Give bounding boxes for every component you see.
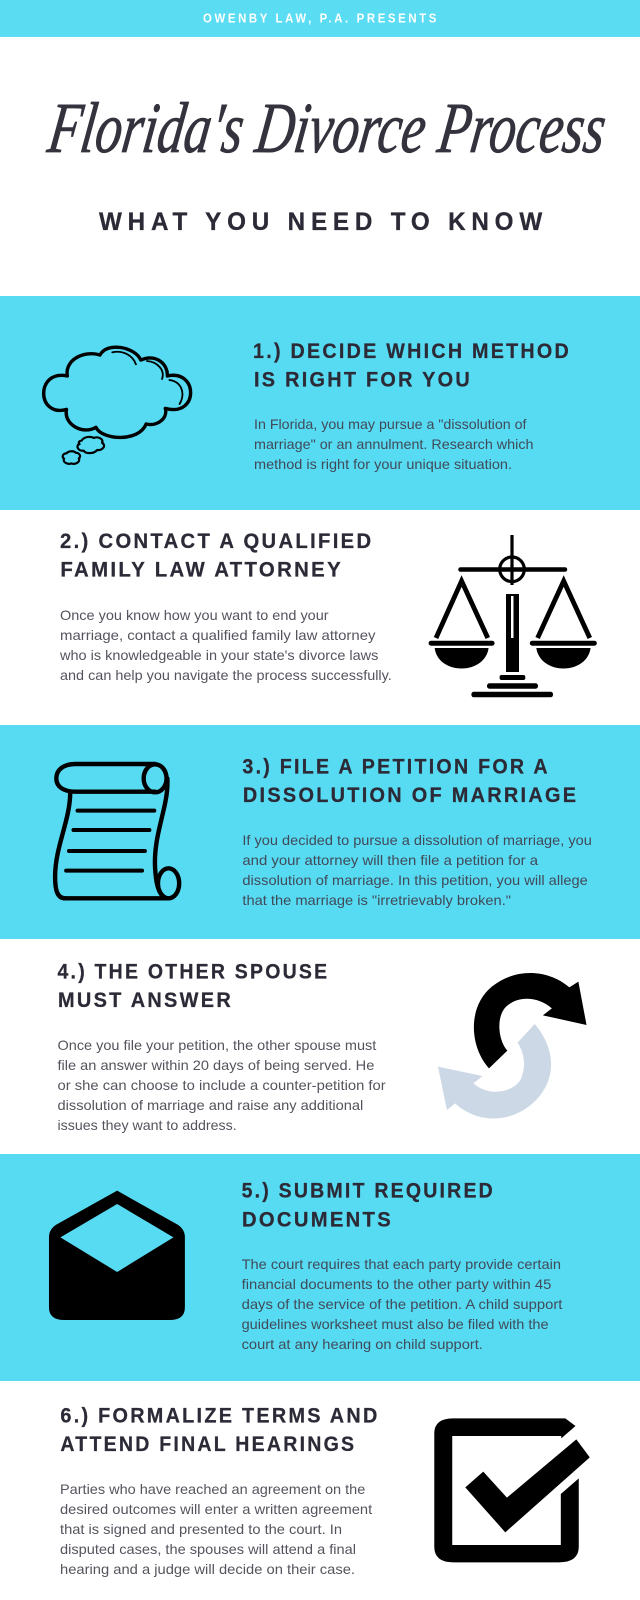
- text: step 5 body: The court requires that each party provide certain: [242, 1256, 561, 1272]
- text: step 2 body: Once you know how you want to end your: [60, 607, 329, 623]
- text: step 4 body: Once you file your petition, the other spouse must: [58, 1037, 376, 1053]
- text: step 4 body: dissolution of marriage and raise any additional: [58, 1097, 363, 1113]
- heading: step 5: [242, 1180, 495, 1231]
- heading: step 2: [60, 530, 373, 582]
- text: step 5 body: financial documents to the other party within 45: [242, 1276, 552, 1292]
- panel: step 6: [60, 1404, 590, 1577]
- subtitle: WHAT YOU NEED TO KNOW: [99, 208, 548, 236]
- text: step 2 body: marriage, contact a qualified family law attorney: [60, 627, 376, 643]
- panel: step 5: [0, 1154, 640, 1381]
- panel: step 3: [0, 725, 640, 939]
- heading: step 1: [253, 340, 571, 392]
- panel: step 1: [0, 296, 640, 510]
- text: step 2 body: who is knowledgeable in your state's divorce laws: [59, 647, 378, 663]
- icon: envelope: [49, 1191, 185, 1320]
- text: step 6 body: that is signed and presented to the court. In: [60, 1521, 342, 1537]
- icon: thought cloud: [44, 347, 191, 464]
- heading: step 4: MUST ANSWER: [58, 989, 233, 1012]
- text: step 5 body: guidelines worksheet must also be filed with the: [242, 1316, 549, 1332]
- text: step 4 body: [58, 1037, 386, 1133]
- text: step 3 body: and your attorney will then file a petition for a: [242, 852, 538, 868]
- text: step 1 body: [254, 416, 534, 472]
- icon: scroll: [55, 764, 179, 898]
- text: step 3 body: If you decided to pursue a dissolution of marriage, you: [242, 832, 592, 848]
- text: step 5 body: days of the service of the petition. A child support: [242, 1296, 563, 1312]
- icon: scales of justice: [429, 535, 597, 697]
- text: step 5 body: [242, 1256, 563, 1352]
- heading: step 4: [58, 960, 329, 1012]
- text: step 1 body: marriage" or an annulment. Research which: [254, 436, 534, 452]
- text: step 1 body: method is right for your unique situation.: [254, 456, 512, 472]
- heading: step 3: DISSOLUTION OF MARRIAGE: [243, 784, 578, 807]
- heading: step 3: 3.) FILE A PETITION FOR A: [242, 755, 550, 778]
- top banner: OWENBY LAW, P.A. PRESENTS: [203, 11, 439, 26]
- text: step 6 body: disputed cases, the spouses will attend a final: [60, 1541, 356, 1557]
- heading: step 2: 2.) CONTACT A QUALIFIED: [60, 530, 373, 553]
- text: step 1 body: In Florida, you may pursue a "dissolution of: [254, 416, 527, 432]
- heading: step 1: IS RIGHT FOR YOU: [254, 369, 472, 392]
- text: step 4 body: file an answer within 20 days of being served. He: [58, 1057, 375, 1073]
- heading: step 6: 6.) FORMALIZE TERMS AND: [60, 1404, 380, 1427]
- top banner: [0, 0, 640, 37]
- text: step 3 body: that the marriage is "irretrievably broken.": [242, 892, 511, 908]
- text: step 6 body: hearing and a judge will decide on their case.: [60, 1561, 355, 1577]
- heading: step 2: FAMILY LAW ATTORNEY: [60, 559, 343, 582]
- text: step 3 body: [242, 832, 592, 908]
- text: step 6 body: [60, 1481, 372, 1577]
- text: step 2 body: [59, 607, 392, 683]
- heading: step 3: [242, 755, 578, 807]
- text: step 2 body: and can help you navigate the process successfully.: [60, 667, 392, 683]
- text: step 4 body: or she can choose to include a counter-petition for: [58, 1077, 386, 1093]
- icon: cycle arrows: [438, 973, 587, 1119]
- heading: step 6: ATTEND FINAL HEARINGS: [60, 1433, 356, 1456]
- panel: step 4: [58, 960, 587, 1133]
- panel: step 2: [59, 530, 597, 697]
- text: step 3 body: dissolution of marriage. In this petition, you will allege: [242, 872, 588, 888]
- heading: step 1: 1.) DECIDE WHICH METHOD: [253, 340, 571, 363]
- heading: step 6: [60, 1404, 380, 1456]
- text: step 4 body: issues they want to address.: [58, 1117, 237, 1133]
- heading: step 4: 4.) THE OTHER SPOUSE: [58, 960, 329, 983]
- heading: step 5: 5.) SUBMIT REQUIRED: [242, 1180, 495, 1203]
- icon: checkbox: [434, 1418, 590, 1562]
- text: step 6 body: desired outcomes will enter a written agreement: [60, 1501, 372, 1517]
- text: step 6 body: Parties who have reached an agreement on the: [60, 1481, 366, 1497]
- text: step 5 body: court at any hearing on child support.: [242, 1336, 483, 1352]
- heading: step 5: DOCUMENTS: [242, 1208, 393, 1231]
